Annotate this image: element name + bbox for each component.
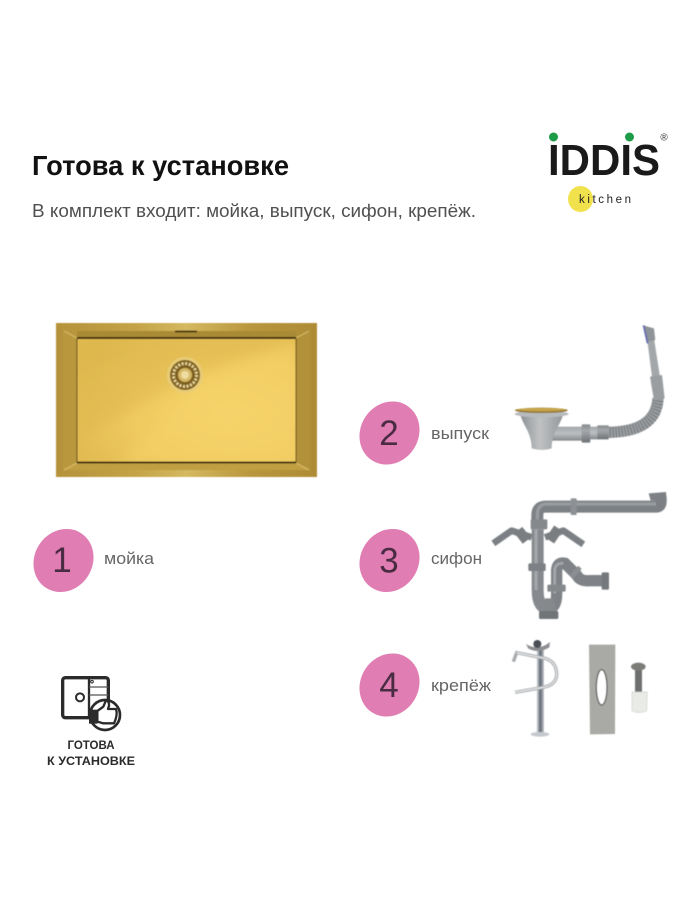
registered mark: ® [660,132,668,144]
sink front wall [63,463,310,470]
flange [515,411,569,417]
right barb [545,531,583,544]
elbow slit [571,567,580,577]
barb nuts [518,528,558,541]
clamp bolt [537,647,544,735]
logo wordmark: IDDIS [548,136,660,185]
sink right wall [296,331,310,470]
number 4: 4 [379,666,399,705]
marker: 3 [348,518,431,603]
clamp wings [526,642,550,651]
outlet pipe [550,427,583,441]
bowl edge shadows [77,338,296,463]
plate [589,645,615,734]
top knob [91,680,93,683]
thumb circle [90,700,120,730]
label: сифон: сифон [431,549,482,568]
marker: 2 [348,390,431,476]
caption line 2: К УСТАНОВКЕ [47,754,135,768]
blob 4 [348,642,431,728]
thumb cuff [89,710,98,724]
subtitle: В комплект входит: мойка, выпуск, сифон, крепёж. [32,201,476,221]
blob 2 [348,390,431,476]
icon caption [47,738,135,768]
wire bracket [513,653,557,692]
overflow sleeve [650,375,665,401]
label: выпуск: выпуск [431,424,490,443]
caption line 1: ГОТОВА [68,738,115,752]
gold plug [515,408,568,413]
left barb [493,531,532,543]
cabinet outline [63,678,108,718]
plastic sleeve [632,692,647,712]
bottom cup [543,598,557,612]
sink back wall [77,331,296,338]
screw head [631,663,646,671]
S trap [548,563,604,608]
marker: 1 [22,518,105,603]
cabinet divider [85,678,92,718]
label: мойка: мойка [104,549,155,568]
flange at outlet [649,492,667,501]
blob 1 [22,518,105,603]
kitchen label: kitchen [579,194,631,206]
outlet flange [602,572,609,590]
yellow spot [568,186,593,212]
drawer lines [89,687,108,695]
coupling [597,425,609,439]
sink left wall [63,331,77,470]
icon: ready to install [63,678,120,730]
number 3: 3 [379,542,399,580]
overflow tube [647,338,660,377]
bowl reflections [112,348,242,409]
clamp foot [531,732,549,737]
fasteners photo [513,640,647,737]
overflow head [643,325,655,342]
corner highlights [64,331,309,470]
trap nut [547,585,566,592]
horizontal pipe with elbow [537,497,661,527]
nut [582,424,590,443]
corrugated hose [607,398,658,432]
marker: 4 [348,642,431,728]
pipe clamp [571,498,577,515]
sink rim [56,323,317,477]
title: Готова к установке [32,150,289,181]
knob [76,693,84,701]
middle nut [528,563,546,571]
siphon photo [493,492,667,619]
number 2: 2 [379,414,399,453]
overflow slot [175,330,197,332]
drain [167,357,203,393]
blob 3 [348,518,431,603]
label: крепёж: крепёж [431,676,492,695]
number 1: 1 [52,541,72,580]
sink photo [56,323,317,477]
waste fitting photo [515,325,665,450]
sink bowl [77,338,296,463]
plate slot [596,670,607,705]
logo green dots [549,132,634,142]
upper nut [531,519,547,529]
screw shaft [635,669,642,693]
strainer body [521,416,563,450]
logo: IDDIS kitchen [548,132,668,212]
clamp head [533,640,541,648]
vertical pipe [538,529,548,608]
thumb hand [97,700,117,723]
